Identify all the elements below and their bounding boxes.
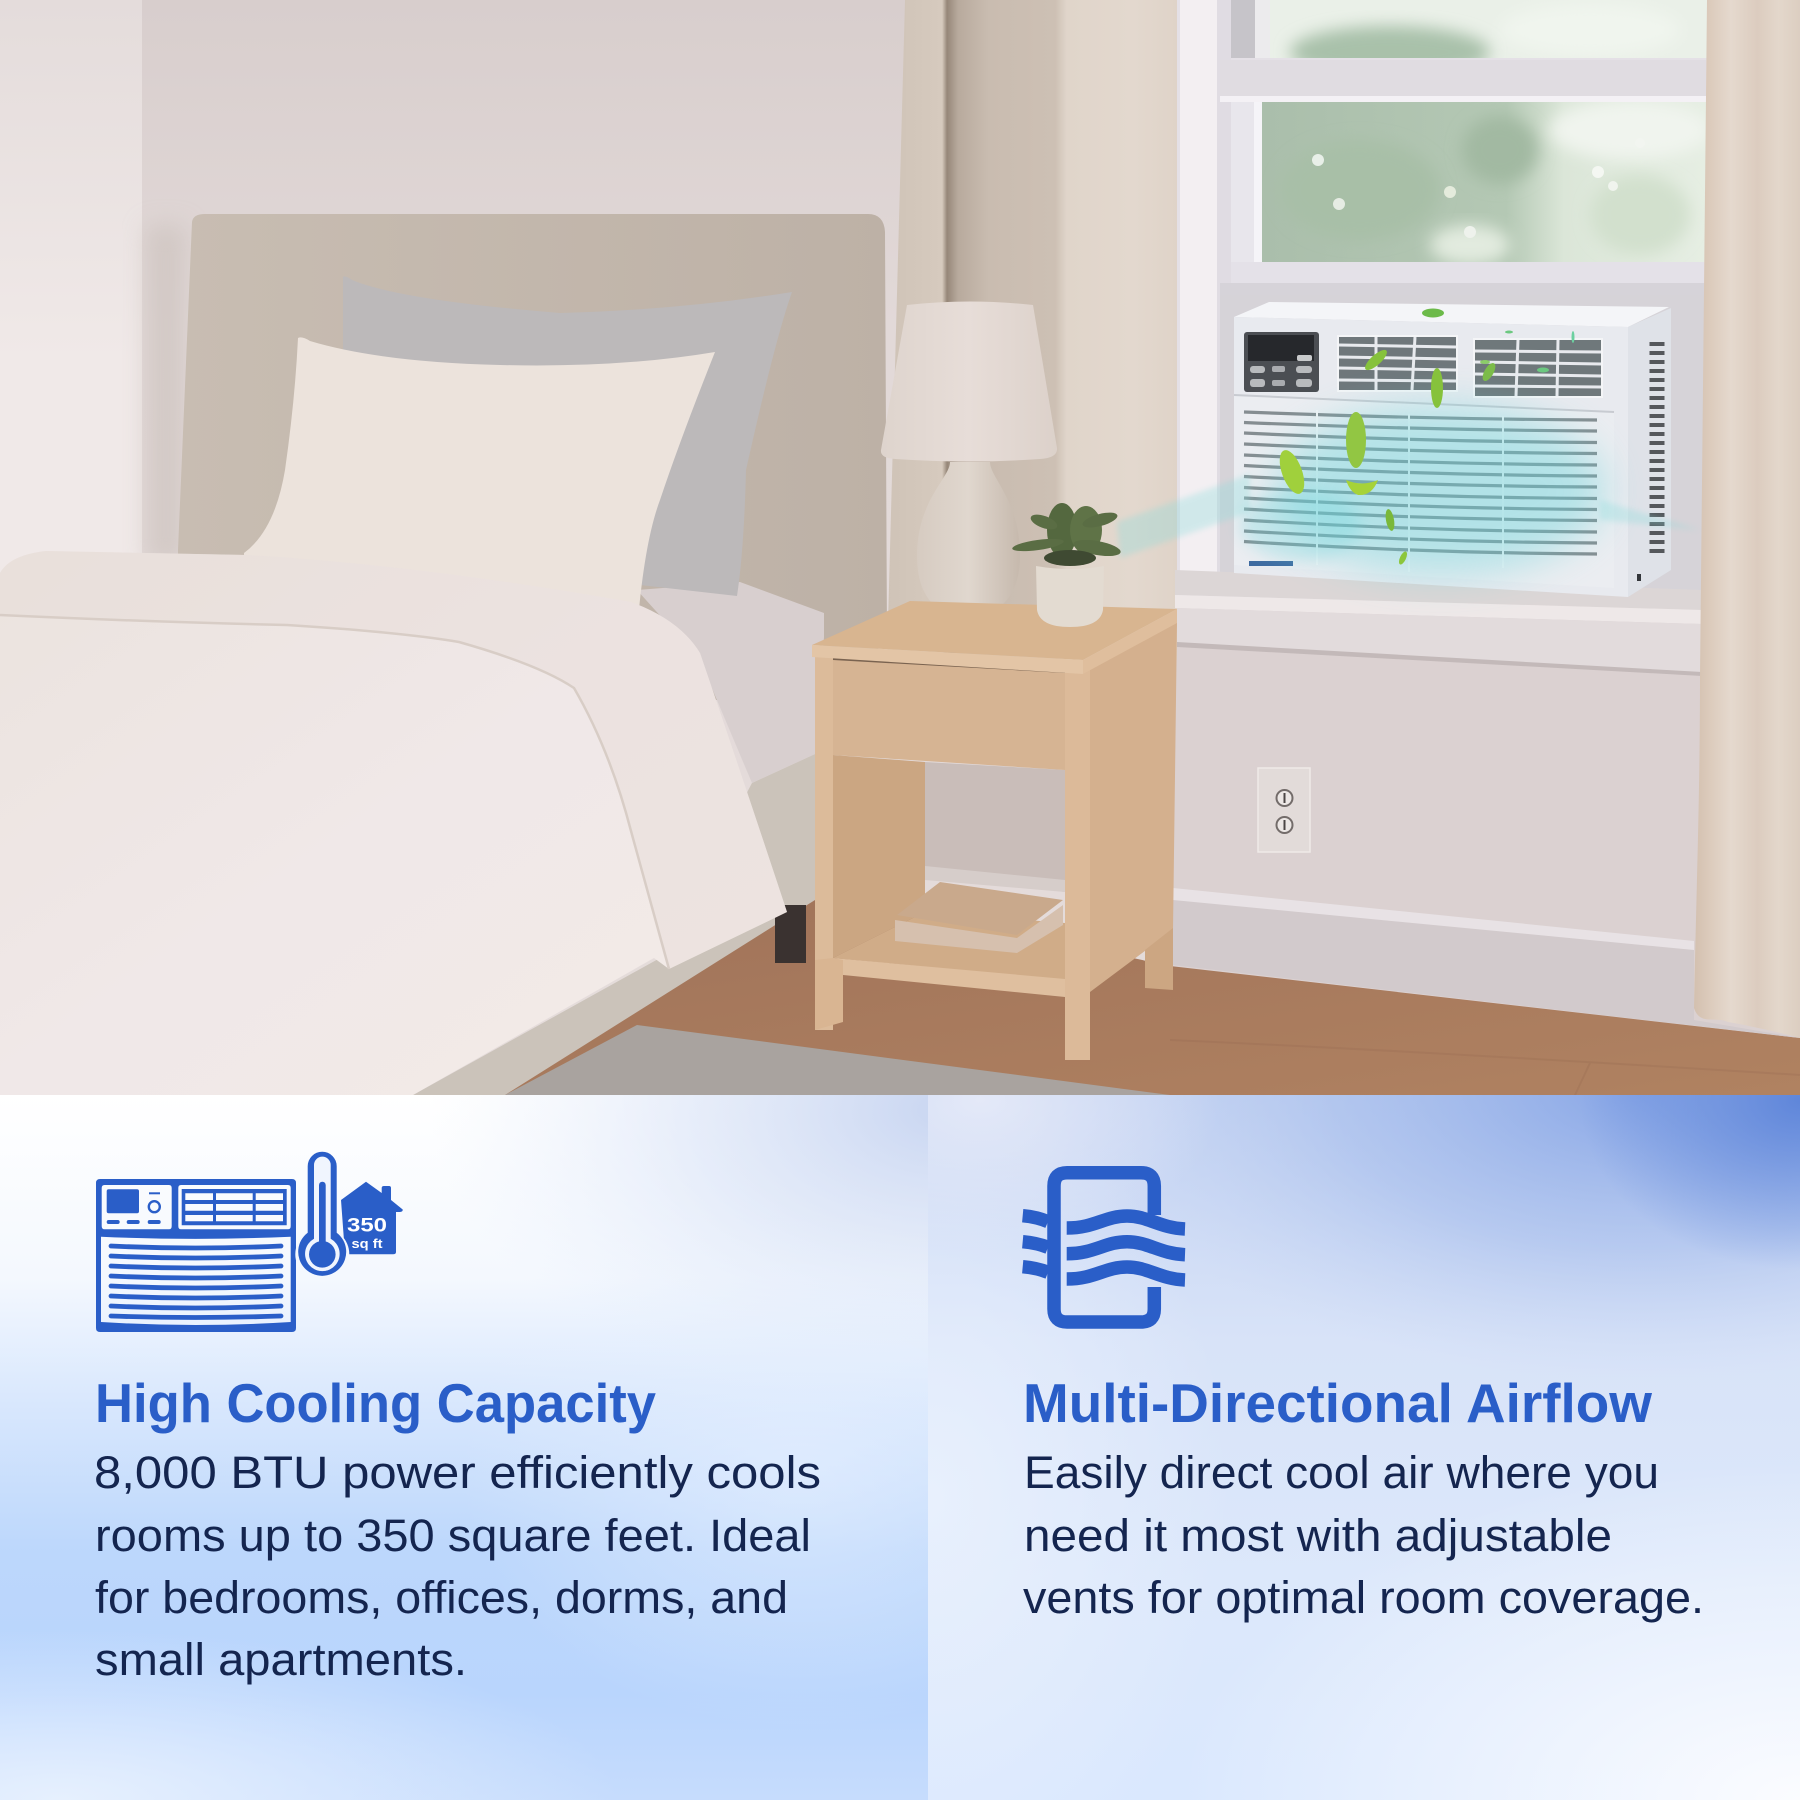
control panel <box>1244 332 1319 392</box>
photo: bedroom scene with window air conditioner <box>0 0 1800 1095</box>
fitted sheet <box>637 582 824 783</box>
rear leg <box>1145 928 1173 990</box>
baseboard <box>1173 888 1798 1038</box>
left side wall <box>0 0 142 600</box>
upper vent left <box>1337 335 1458 392</box>
front grille <box>1234 395 1614 588</box>
lower glass with blurred trees <box>1262 100 1710 265</box>
bed base <box>413 754 815 1095</box>
books <box>895 882 1063 953</box>
left curtain <box>887 0 1177 660</box>
plant <box>1012 503 1122 566</box>
wall outlet <box>1258 768 1310 852</box>
AC unit <box>96 1179 296 1332</box>
right curtain <box>1694 0 1800 1038</box>
heading: Multi-Directional Airflow <box>1023 1372 1652 1434</box>
shelf <box>833 912 1065 980</box>
front legs <box>815 650 833 1030</box>
wall below window <box>1173 647 1794 1037</box>
floor <box>505 900 1800 1095</box>
upper vent right <box>1473 338 1603 398</box>
body text: 8,000 BTU power efficiently cools <box>94 1447 821 1498</box>
lower sash stile <box>1231 100 1255 265</box>
lamp base <box>917 462 1020 617</box>
side panel <box>1083 622 1177 992</box>
panel background <box>0 1095 928 1800</box>
lamp shade <box>881 302 1057 462</box>
grey pillow <box>343 276 792 596</box>
front face <box>1234 317 1628 597</box>
body text <box>1023 1447 1704 1623</box>
floor plank lines <box>1170 1040 1800 1095</box>
tabletop <box>812 601 1177 660</box>
opening back <box>925 762 1065 892</box>
window frame and trim <box>1177 0 1710 600</box>
lamp <box>881 302 1057 617</box>
drawer <box>833 660 1065 770</box>
house with 350 sq ft label <box>341 1182 403 1254</box>
body text: rooms up to 350 square feet. Ideal <box>95 1510 811 1561</box>
heading: High Cooling Capacity <box>95 1372 656 1434</box>
air conditioner <box>1117 302 1700 597</box>
power button <box>1637 574 1641 581</box>
meeting rail <box>1220 60 1706 98</box>
upper sash stile <box>1231 0 1255 58</box>
body text <box>94 1447 821 1685</box>
falling leaves <box>1275 308 1574 566</box>
top surface <box>1234 302 1669 327</box>
white pillow <box>244 337 715 620</box>
rug <box>505 1025 1170 1095</box>
house with 350 sq ft label: 350 <box>347 1216 387 1237</box>
icon: air conditioner, thermometer and 350 sq ft house <box>96 1152 403 1332</box>
bed leg <box>775 905 806 963</box>
cool air stream <box>1117 405 1700 575</box>
window sill and apron <box>1175 570 1702 676</box>
vent outline <box>1054 1173 1154 1322</box>
inner left panel <box>833 755 925 958</box>
left air stubs <box>1023 1216 1048 1272</box>
back wall <box>142 0 1697 1094</box>
headboard <box>146 214 887 700</box>
panel background <box>928 1095 1800 1800</box>
house with 350 sq ft label: sq ft <box>352 1236 383 1251</box>
icon: airflow through vent <box>1023 1173 1185 1322</box>
body text: small apartments. <box>95 1634 467 1685</box>
panel: multi-directional airflow <box>928 1095 1800 1800</box>
body text: vents for optimal room coverage. <box>1023 1572 1704 1623</box>
nightstand <box>812 601 1177 1060</box>
side panel <box>1628 308 1671 597</box>
panel: high cooling capacity <box>0 1095 928 1800</box>
plant pot <box>1036 566 1104 627</box>
body text: Easily direct cool air where you <box>1024 1447 1659 1498</box>
brand mark <box>1249 561 1293 566</box>
drawer shadow <box>833 655 1065 675</box>
thermometer <box>295 1152 349 1281</box>
air waves <box>1067 1216 1185 1229</box>
body text: for bedrooms, offices, dorms, and <box>95 1572 788 1623</box>
upper glass <box>1270 0 1707 58</box>
lower rail <box>1254 262 1262 265</box>
duvet <box>0 551 787 1095</box>
side vent <box>1650 342 1664 558</box>
body text: need it most with adjustable <box>1024 1510 1612 1561</box>
